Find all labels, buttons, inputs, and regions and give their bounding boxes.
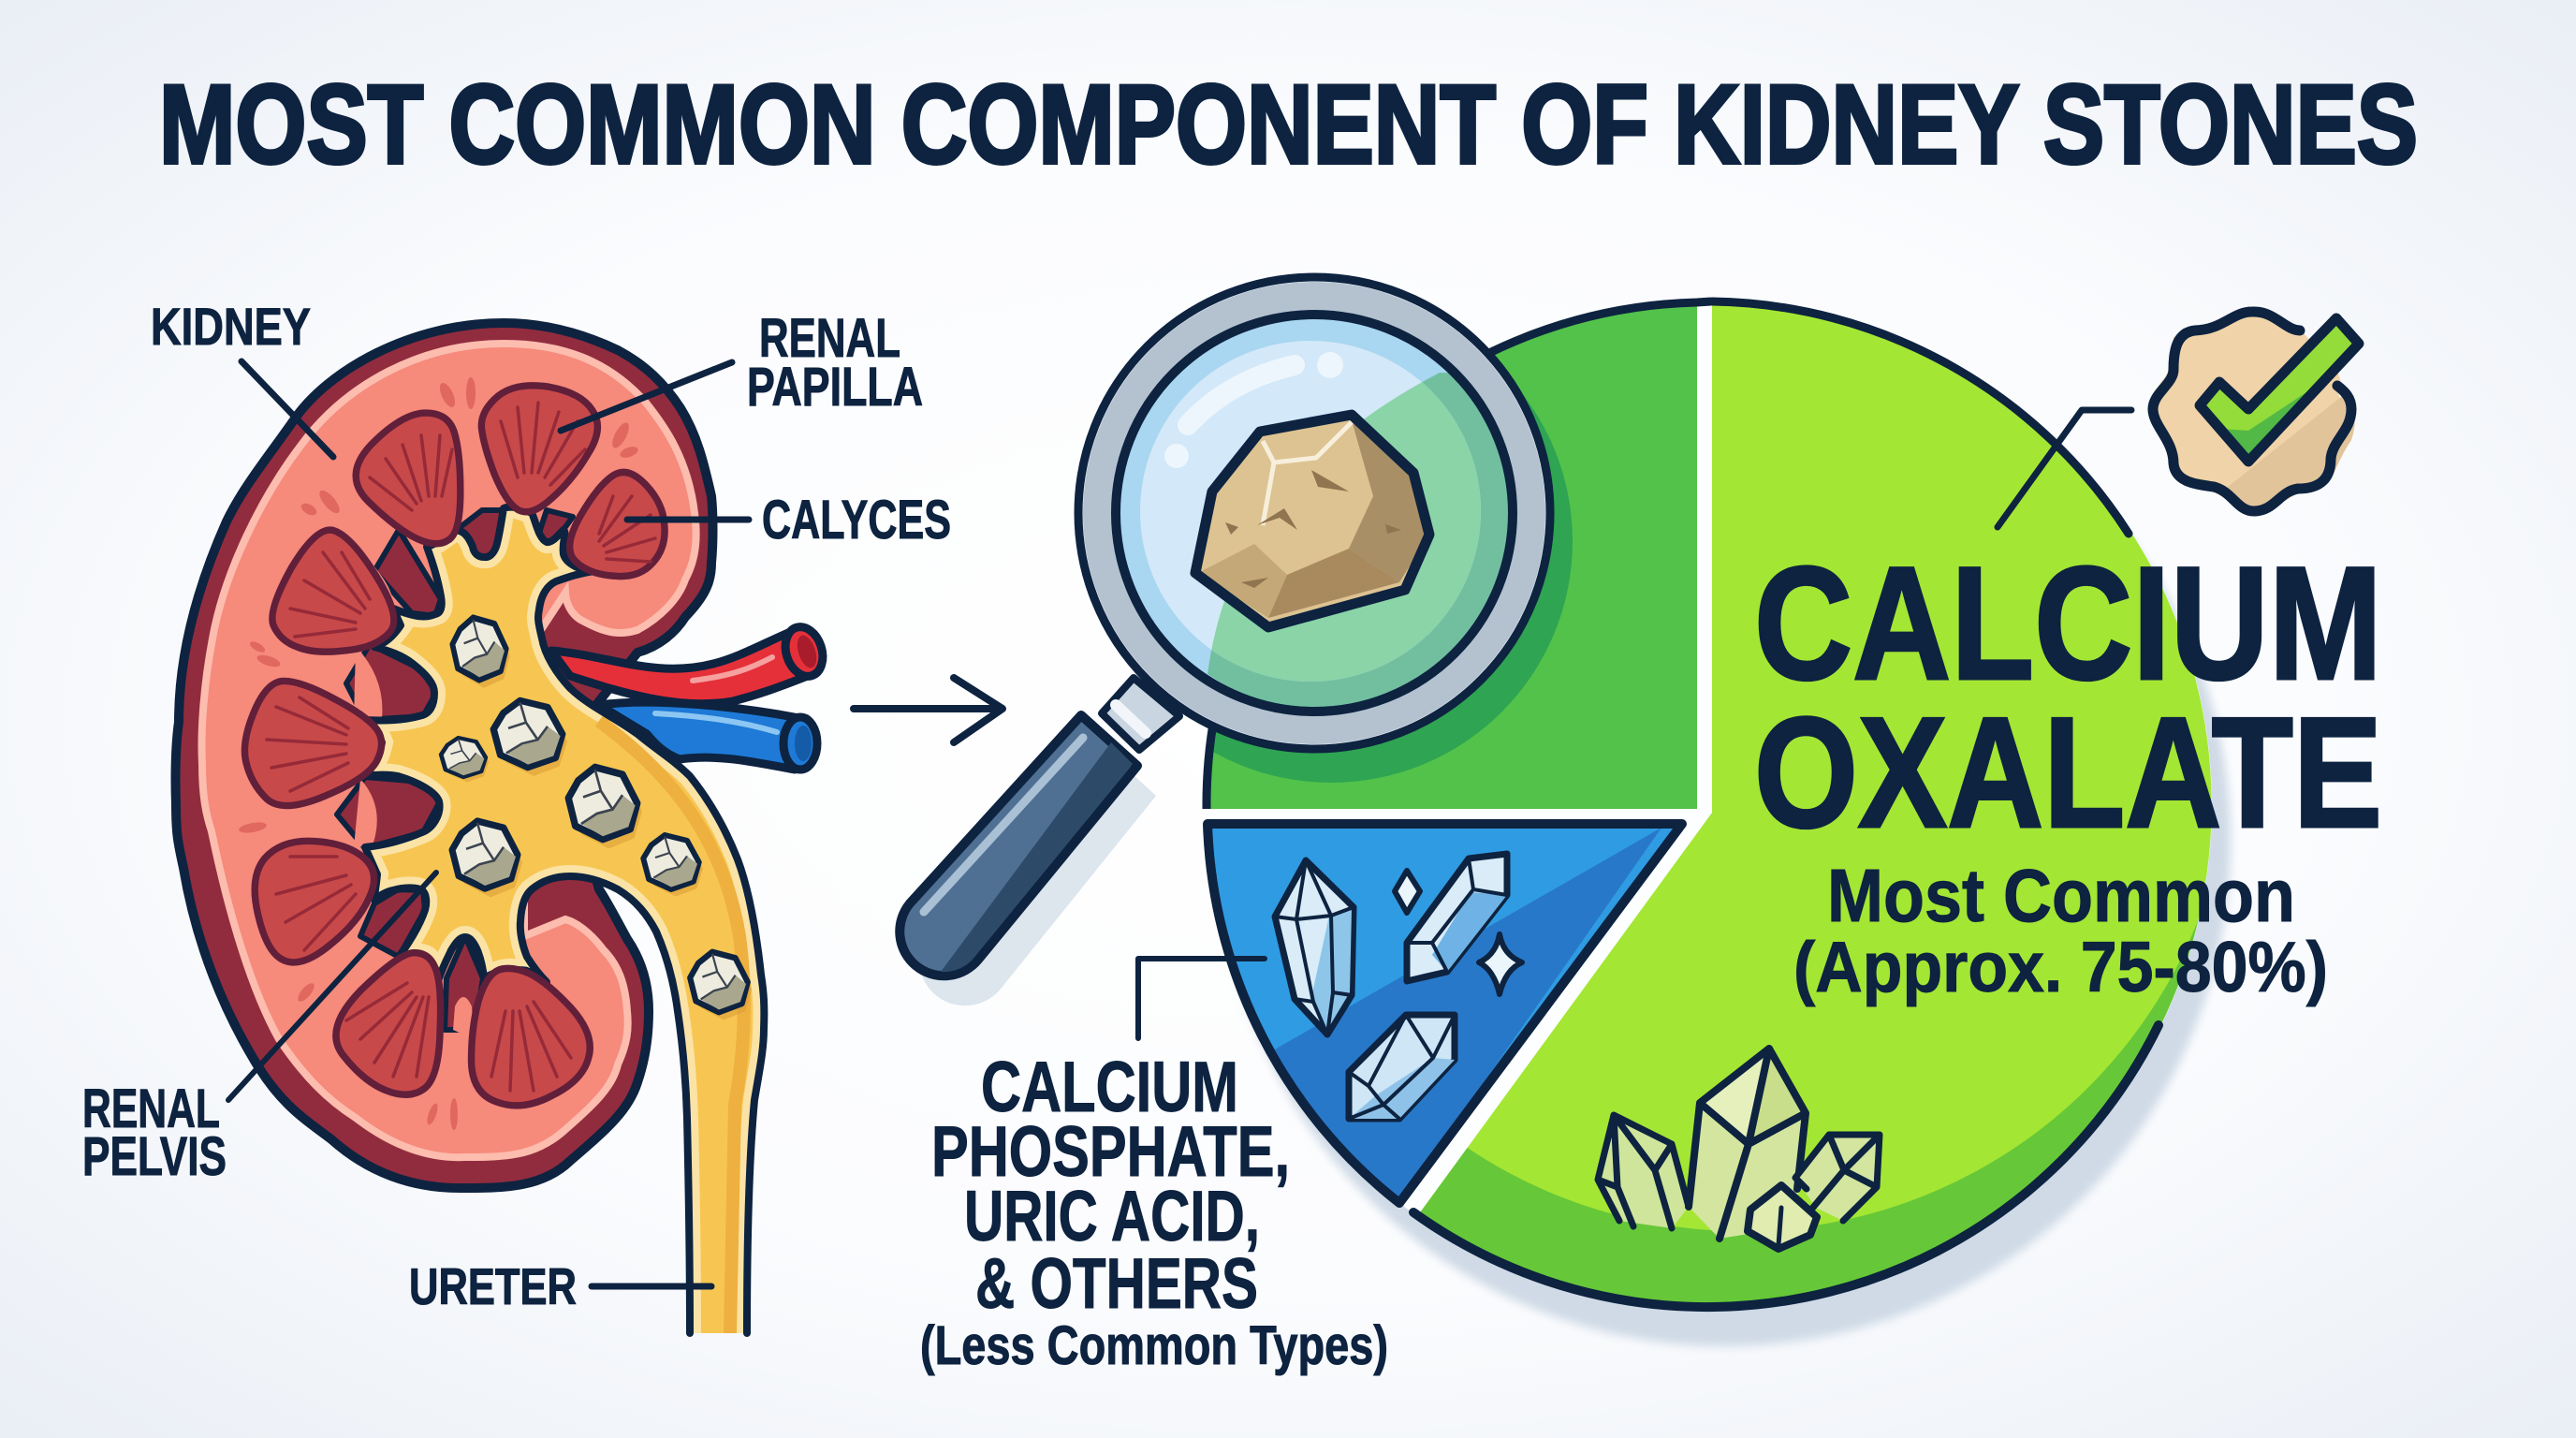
label: other stone types: URIC ACID, xyxy=(964,1177,1260,1256)
dark green segment xyxy=(1202,298,1711,809)
label: other stone types: PHOSPHATE, xyxy=(931,1112,1290,1192)
label: kidney: KIDNEY xyxy=(151,297,311,356)
label: ureter: URETER xyxy=(409,1257,577,1315)
kidney stones xyxy=(441,618,752,1020)
blue segment: other stones xyxy=(1208,824,1682,1203)
label: renal papilla: RENAL xyxy=(759,308,900,369)
leader: badge xyxy=(1998,410,2131,527)
label: other stone types: CALCIUM xyxy=(981,1048,1238,1127)
renal vein xyxy=(599,702,817,770)
leader: blue segment xyxy=(1138,959,1265,1038)
kidney cortex xyxy=(201,344,696,1157)
label: kidney xyxy=(151,297,333,457)
cortex flecks xyxy=(238,377,639,1130)
icon: lens xyxy=(1078,277,1550,749)
renal pelvis and ureter xyxy=(365,507,764,1333)
label: renal pelvis xyxy=(82,873,436,1187)
label: other stone types: (Less Common Types) xyxy=(920,1315,1388,1376)
bright green segment: calcium oxalate xyxy=(1409,298,2212,1313)
renal pyramids xyxy=(244,386,665,1106)
arrow xyxy=(854,678,1003,742)
main label: calcium oxalate: CALCIUM xyxy=(1754,534,2382,713)
icon: blue crystals xyxy=(1275,854,1522,1119)
icon: green crystals xyxy=(1598,1049,1880,1249)
label: renal pelvis: RENAL xyxy=(82,1078,220,1139)
label: calyces: CALYCES xyxy=(762,490,951,550)
main label: calcium oxalate: (Approx. 75-80%) xyxy=(1793,928,2328,1007)
renal artery xyxy=(551,622,828,704)
pie chart xyxy=(1202,298,2235,1350)
label: renal papilla xyxy=(561,308,923,431)
icon: check badge xyxy=(2151,312,2359,511)
main label: calcium oxalate xyxy=(1754,534,2382,1007)
icon: handle xyxy=(900,678,1179,1005)
kidney diagram xyxy=(175,323,828,1333)
main label: calcium oxalate: OXALATE xyxy=(1754,684,2382,860)
magnifying glass xyxy=(900,277,1550,1005)
kidney body xyxy=(175,323,712,1188)
medullary fingers xyxy=(337,510,573,1030)
label: other stone types: & OTHERS xyxy=(975,1244,1258,1324)
label: renal pelvis: PELVIS xyxy=(82,1126,227,1187)
main label: calcium oxalate: Most Common xyxy=(1827,854,2295,937)
icon: magnified stone xyxy=(1195,415,1429,627)
label: renal papilla: PAPILLA xyxy=(747,357,923,418)
label: other stone types xyxy=(920,1048,1388,1376)
